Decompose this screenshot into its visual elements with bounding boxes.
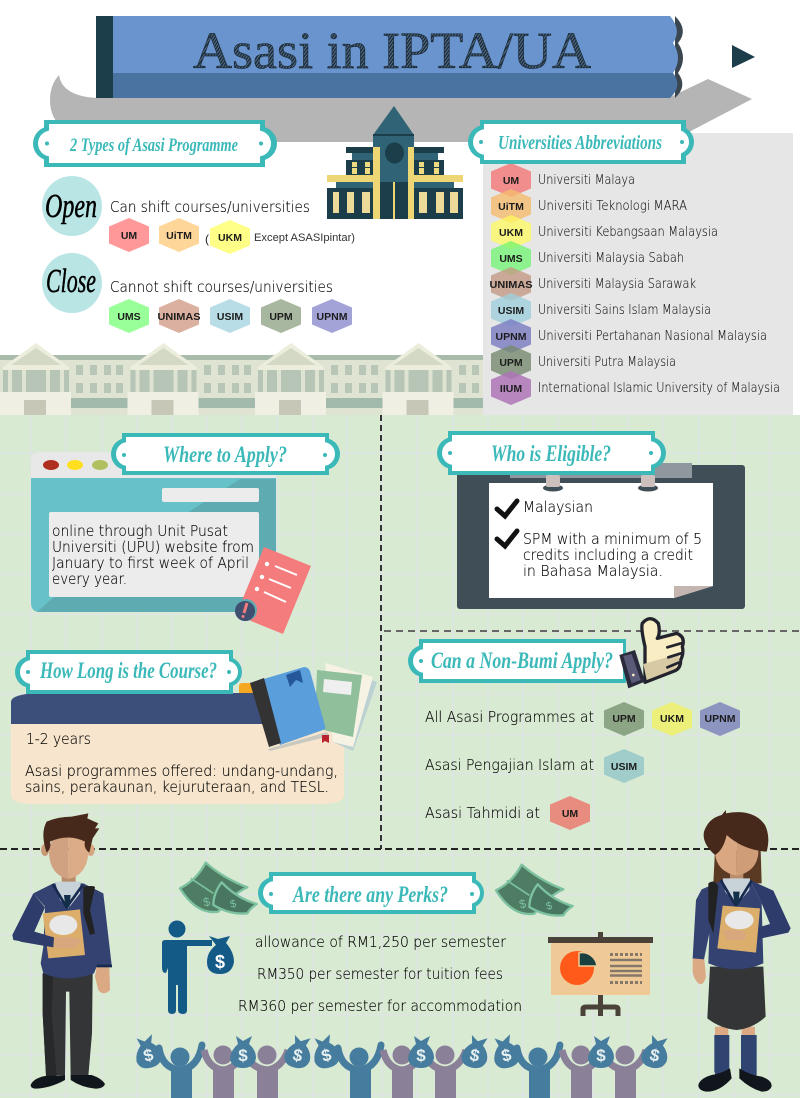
hexagon UPNM: UPNM <box>317 311 348 323</box>
icon: university building <box>327 106 463 219</box>
money bag: $ <box>596 1046 606 1065</box>
section dividers <box>0 415 800 849</box>
hexagon UKM <box>652 702 692 736</box>
hexagon UKM with exception <box>205 220 355 254</box>
eligibility item 2: SPM with a minimum of 5 <box>523 530 702 548</box>
hexagon UKM with exception: UKM <box>218 232 242 244</box>
hexagon UM <box>109 218 149 252</box>
panel: clipboard who is eligible <box>457 463 745 609</box>
where to apply text <box>52 522 254 588</box>
icon: check <box>497 501 517 516</box>
where to apply text: every year. <box>52 570 127 588</box>
hexagon UNIMAS: UNIMAS <box>158 311 200 323</box>
list item IIUM: IIUM <box>500 383 522 395</box>
hexagon UMS: UMS <box>117 311 141 323</box>
where to apply text: Universiti (UPU) website from <box>52 538 254 556</box>
money bag: $ <box>416 1046 426 1065</box>
list item UMS: Universiti Malaysia Sabah <box>538 251 684 266</box>
icon: presentation board <box>548 932 653 1016</box>
money bag: $ <box>499 1045 514 1066</box>
list item UMS: UMS <box>499 253 523 265</box>
banner: How Long is the Course?: How Long is the Course? <box>39 658 217 683</box>
money bag <box>131 1033 164 1071</box>
course text: 1-2 years <box>26 730 91 748</box>
banner: Who is Eligible? <box>437 431 666 475</box>
panel: course length <box>11 683 344 804</box>
person <box>383 1046 422 1098</box>
icon: money left: $ <box>229 898 238 911</box>
list item UiTM: Universiti Teknologi MARA <box>538 199 687 214</box>
hexagon USIM: USIM <box>217 311 243 323</box>
list item UPM: Universiti Putra Malaysia <box>538 355 676 370</box>
hexagon UM: UM <box>121 230 137 242</box>
banner: 2 Types of Asasi Programme <box>33 120 277 167</box>
icon: money right: $ <box>545 900 554 913</box>
hexagon UPM <box>261 299 301 333</box>
where to apply text: online through Unit Pusat <box>52 522 228 540</box>
list item UPNM: UPNM <box>496 331 527 343</box>
hexagon UM <box>550 796 590 830</box>
banner: Are there any Perks?: Are there any Perks? <box>291 882 448 907</box>
course text <box>25 730 338 796</box>
hexagon USIM: USIM <box>611 761 637 773</box>
list item USIM: USIM <box>498 305 524 317</box>
person <box>204 1046 243 1098</box>
male student <box>12 813 112 1089</box>
list item UiTM <box>491 189 687 223</box>
gray arrow behind title <box>50 75 752 142</box>
money bag <box>282 1034 314 1070</box>
non-bumi row 3 <box>425 796 590 830</box>
crowd with money bags <box>131 1033 671 1098</box>
non-bumi row 1: All Asasi Programmes at <box>425 708 594 726</box>
hexagon UM: UM <box>562 808 578 820</box>
hexagon UiTM <box>159 218 199 252</box>
list item UiTM: UiTM <box>498 201 524 213</box>
banner: Where to Apply?: Where to Apply? <box>163 442 287 467</box>
list item UPNM <box>491 319 767 353</box>
person <box>604 1046 646 1098</box>
hexagon USIM <box>604 749 644 783</box>
money bag: $ <box>141 1045 156 1066</box>
eligibility item 1: Malaysian <box>523 498 593 516</box>
hexagon UKM: UKM <box>660 713 684 725</box>
list item UMS <box>491 241 684 275</box>
perks list: RM360 per semester for accommodation <box>238 997 522 1015</box>
hexagon UPNM <box>312 299 352 333</box>
list item UPNM: Universiti Pertahanan Nasional Malaysia <box>538 329 767 344</box>
hexagon UiTM: UiTM <box>166 230 192 242</box>
money bag <box>588 1036 614 1068</box>
money bag: $ <box>291 1045 305 1066</box>
icon: play triangle <box>732 45 755 68</box>
banner: Who is Eligible?: Who is Eligible? <box>491 441 611 466</box>
eligibility item 2: credits including a credit <box>523 546 693 564</box>
list item UM: UM <box>503 175 519 187</box>
decorative green grid background <box>0 415 800 1098</box>
non-bumi row 2: Asasi Pengajian Islam at <box>425 756 594 774</box>
icon: thumbs up <box>619 619 683 688</box>
icon: money left: $ <box>202 894 212 910</box>
icon: money right <box>496 865 573 916</box>
panel: where to apply browser window <box>31 452 276 612</box>
hexagon UPM: UPM <box>612 713 636 725</box>
hexagon USIM <box>210 299 250 333</box>
banner: Are there any Perks? <box>258 872 484 914</box>
list item UKM: Universiti Kebangsaan Malaysia <box>538 225 718 240</box>
banner: Can a Non-Bumi Apply? <box>408 639 626 683</box>
list item UM <box>491 163 635 197</box>
title book <box>96 16 683 98</box>
palace strip <box>0 343 490 415</box>
money bag <box>489 1033 522 1071</box>
list item UPM: UPM <box>499 357 523 369</box>
non-bumi row 2 <box>425 749 644 783</box>
hexagon UKM with exception: Except ASASIpintar) <box>254 232 355 244</box>
icon: checklist note <box>235 547 311 634</box>
icon: money right: $ <box>518 896 528 912</box>
banner: How Long is the Course? <box>15 650 242 694</box>
banner: 2 Types of Asasi Programme: 2 Types of Asasi Programme <box>69 135 238 156</box>
person <box>338 1045 381 1098</box>
banner: Universities Abbreviations <box>468 120 694 164</box>
non-bumi row 3: Asasi Tahmidi at <box>425 804 540 822</box>
icon: check <box>497 531 517 546</box>
title: Asasi in IPTA/UA <box>193 23 591 80</box>
list item UKM <box>491 215 718 249</box>
hexagon UPM: UPM <box>269 311 293 323</box>
person <box>425 1046 466 1098</box>
hexagon UPM <box>604 702 644 736</box>
list item UKM: UKM <box>499 227 523 239</box>
banner: Universities Abbreviations: Universities Abbreviations <box>498 132 662 154</box>
close description: Cannot shift courses/universities <box>110 278 333 296</box>
eligibility item 2: in Bahasa Malaysia. <box>523 562 663 580</box>
non-bumi row 1 <box>425 702 740 736</box>
money bag: $ <box>648 1045 662 1066</box>
close category: Close <box>46 263 96 300</box>
banner: Where to Apply? <box>111 433 340 475</box>
money bag <box>459 1034 491 1070</box>
list item USIM: Universiti Sains Islam Malaysia <box>538 303 711 318</box>
person <box>517 1045 560 1098</box>
money bag <box>309 1033 342 1071</box>
list item USIM <box>491 293 711 327</box>
money bag: $ <box>468 1045 482 1066</box>
perks list: RM350 per semester for tuition fees <box>257 965 503 983</box>
hexagon UKM with exception: ( <box>205 232 209 246</box>
panel: universities abbreviations <box>483 133 793 415</box>
open category: Open <box>45 188 97 225</box>
list item UNIMAS <box>490 267 696 301</box>
hexagon UMS <box>109 299 149 333</box>
course text: sains, perakaunan, kejuruteraan, and TESL. <box>25 778 329 796</box>
icon: person holding money bag: $ <box>215 952 225 972</box>
list item UM: Universiti Malaya <box>538 173 635 188</box>
perks list <box>238 933 522 1015</box>
where to apply text: January to first week of April <box>52 554 249 572</box>
money bag <box>408 1036 434 1068</box>
list item UNIMAS: UNIMAS <box>490 279 532 291</box>
banner: Can a Non-Bumi Apply?: Can a Non-Bumi Apply? <box>431 648 613 673</box>
female student <box>693 810 791 1092</box>
open description: Can shift courses/universities <box>110 198 310 216</box>
money bag <box>230 1036 256 1068</box>
person <box>246 1046 288 1098</box>
hexagon UPNM: UPNM <box>705 713 736 725</box>
money bag: $ <box>319 1045 334 1066</box>
icon: person holding money bag <box>162 920 234 1014</box>
close category <box>42 253 352 333</box>
icon: money left <box>180 863 257 914</box>
list item IIUM <box>491 371 780 405</box>
eligibility item 2 <box>523 530 702 580</box>
list item UPM <box>491 345 676 379</box>
hexagon UPNM <box>700 702 740 736</box>
list item UNIMAS: Universiti Malaysia Sarawak <box>538 277 696 292</box>
money bag <box>639 1034 671 1070</box>
open category <box>42 176 355 254</box>
person <box>562 1046 601 1098</box>
money bag: $ <box>238 1046 248 1065</box>
icon: books <box>250 663 377 751</box>
hexagon UNIMAS <box>158 299 200 333</box>
course text: Asasi programmes offered: undang-undang, <box>25 762 338 780</box>
person <box>159 1045 202 1098</box>
perks list: allowance of RM1,250 per semester <box>255 933 507 951</box>
